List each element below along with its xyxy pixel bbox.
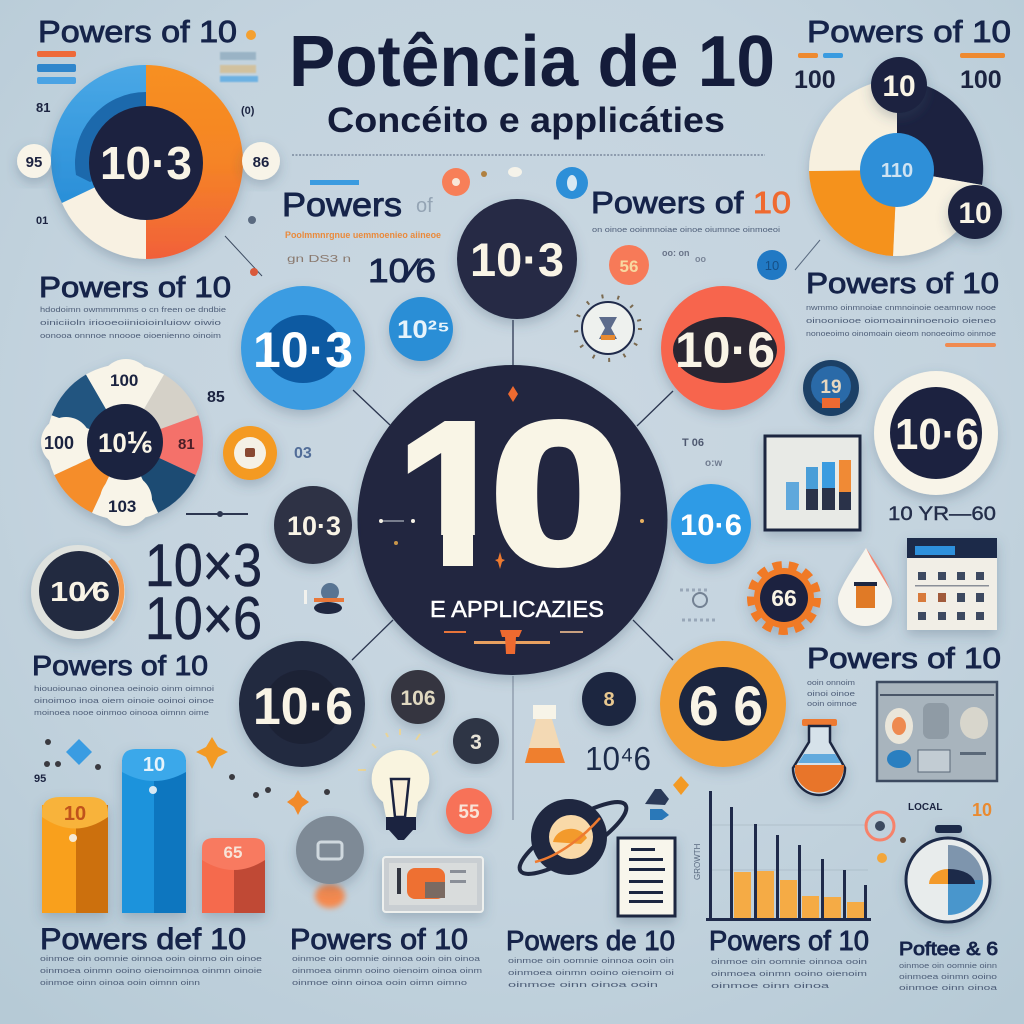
circle: dark top centre <box>457 199 577 319</box>
footer column 3: oinmoea oinmn ooino oienoim oi <box>508 968 674 977</box>
footer column 3: Powers de 10 <box>506 925 675 956</box>
legend blocks <box>37 30 258 84</box>
panel: icons card <box>877 682 997 781</box>
small coral ring and label: LOCAL <box>908 802 942 813</box>
footer column 1: oinmoe oinn oinoa ooin oimnn oinn <box>40 978 200 987</box>
big numbers: 10×3 <box>145 532 262 599</box>
footer column 1: oinmoe oin oomnie oinnoa ooin oinmo oin oinoe <box>40 954 262 963</box>
circle: dark 10-3 small: 10·3 <box>287 511 341 541</box>
bar coral <box>202 838 265 913</box>
heading: Powers of 10 <box>807 14 1011 49</box>
footer column 4: oinmoe oin oomnie oinnoa ooin <box>711 957 867 966</box>
circle: small 3 <box>453 718 499 764</box>
icon: small dark mask: 8 <box>603 689 615 711</box>
heading: powers right lower: ooin onnoim <box>807 678 855 687</box>
big number <box>408 419 621 568</box>
text block: powers centre left <box>282 180 441 289</box>
footer column 4: oinmoea oinmn ooino oienoim <box>711 969 867 978</box>
bar orange <box>42 797 108 913</box>
circle: blue 10-3: 10·3 <box>253 322 353 378</box>
icon: cloud <box>645 776 689 820</box>
connector lines <box>352 320 673 820</box>
circle: cream 10-6: 10·6 <box>895 410 979 459</box>
small labels <box>36 100 262 276</box>
side badge left: 95 <box>26 154 42 171</box>
small icons centre right: oo: on <box>662 248 690 258</box>
small chatter centre: 03 <box>294 445 312 462</box>
text block: powers right <box>806 268 999 347</box>
hub decoration <box>379 386 644 654</box>
flower labels: 100 <box>110 371 138 390</box>
footer column 3 <box>506 925 675 989</box>
flower wedges <box>41 359 203 526</box>
bar chart lower: GROWTH <box>693 843 702 880</box>
footer column 3: oinmoe oinn oinoa ooin <box>508 980 658 989</box>
icon: calendar <box>907 538 997 630</box>
side badge right: 86 <box>253 154 269 171</box>
circle: ringed 10-6: 10⁄6 <box>50 576 110 607</box>
central hub <box>358 365 668 675</box>
text block: powers lower left: oinoimoo inoa oiem oinoie ooinoi oinoe <box>34 696 214 705</box>
footer column 2: oinmoe oin oomnie oinnoa ooin oin oinoa <box>292 954 481 963</box>
small coral ring and label: 10 <box>972 800 992 820</box>
circle: orange 66 <box>660 641 786 767</box>
footer column 1 <box>40 923 262 987</box>
text block: powers right: nonoeoimo oinomoain oieom nonoeoimo oinmoe <box>806 329 996 338</box>
badge top <box>871 57 927 113</box>
footer column 2: oinmoe oinn oinoa ooin oimn oimno <box>292 978 467 987</box>
circle: small 106 <box>391 670 445 724</box>
text block: powers lower left <box>32 650 214 717</box>
footer column 2: oinmoea oinmn ooino oienoim oinoa oinm <box>292 966 482 975</box>
small labels: (0) <box>241 105 255 117</box>
circle: small blue: 10²⁵ <box>397 316 450 344</box>
small icons centre right: 56 <box>620 257 638 276</box>
gauge icon <box>906 825 990 922</box>
icon: document <box>618 838 675 916</box>
flower labels: 81 <box>178 436 195 453</box>
text block: powers left <box>39 272 231 340</box>
label 10-6: 10⁴6 <box>585 740 651 777</box>
heading: Powers of 10 <box>38 14 237 49</box>
text block: powers centre left: gn DS3 n <box>287 254 351 265</box>
icon: gear 66 <box>751 565 817 631</box>
small icons centre right: oo <box>695 254 706 264</box>
small coral ring and label <box>866 800 992 863</box>
donut chart <box>51 65 243 259</box>
pie chart: 110 <box>881 160 913 182</box>
footer column 2: Powers of 10 <box>290 924 468 956</box>
hub label: E APPLICAZIES <box>430 596 604 622</box>
icon: small bottle <box>525 705 565 763</box>
side badge left <box>17 144 51 178</box>
footer column 1: oinmoea oinmn ooino oienoimnoa oinmn oinoie <box>40 966 262 975</box>
footer column 5: Poftee & 6 <box>899 939 998 959</box>
circle: coral 55 <box>446 788 492 834</box>
footer column 5: oinmoea oinmn ooino <box>899 972 997 981</box>
big number: 1 <box>397 380 509 606</box>
text block: powers left: oonooa onnnoe nnoooe oioenienno oinoim <box>40 331 221 340</box>
circle: coral 10-6: 10·6 <box>675 322 775 378</box>
donut value: 10·3 <box>100 137 192 189</box>
text block: powers left: hdodoimn owmmmmms o cn freen oe dndbie <box>40 305 226 314</box>
circle: dark 10-6 lower left <box>239 641 365 767</box>
icon: small bits beside hub <box>304 583 344 614</box>
text block: powers right: oinooniooe oiomoainninoenoio oieneo <box>806 316 996 325</box>
big number: 0 <box>490 380 627 606</box>
text block: powers lower left: Powers of 10 <box>32 650 208 681</box>
heading: powers right lower <box>807 643 1001 708</box>
icon: faint sketch <box>680 590 718 620</box>
badge bottom: 10 <box>958 197 992 230</box>
flower labels: 103 <box>108 497 136 516</box>
icon: dark circle small: 19 <box>820 377 842 398</box>
flower centre <box>87 404 163 480</box>
bar blue <box>122 749 186 913</box>
labels 100: 100 <box>960 66 1002 94</box>
stars and marks: 95 <box>34 773 46 785</box>
icon: grey ball <box>296 816 364 908</box>
icon: dark circle small <box>803 360 859 416</box>
text block: powers right: nwmmo oinmnoiae cnmnoinoie oeamnow nooe <box>806 303 996 312</box>
footer column 1: Powers def 10 <box>40 923 246 956</box>
text block: powers centre left: Powers <box>282 186 402 223</box>
circle: dark 10-3 small <box>274 486 352 564</box>
text block: powers centre left: of <box>416 195 433 217</box>
bar chart card <box>765 436 860 530</box>
heading: powers right lower: oinoi oinoe <box>807 689 855 698</box>
3D bar chart <box>42 749 265 913</box>
badge bottom <box>948 185 1002 239</box>
small top icons <box>442 167 588 199</box>
badge top: 10 <box>882 70 916 103</box>
circle: coral 10-6 <box>661 286 785 410</box>
pie chart <box>809 80 983 256</box>
heading: powers of 10 centre right: on oinoe ooinmnoiae oinoe oiumnoe oinmoeoi <box>592 225 780 234</box>
circle: small blue <box>389 297 453 361</box>
label 10 yr 60: 10 YR—60 <box>888 504 996 525</box>
stars and marks <box>34 737 330 815</box>
circle: blue 10-6: 10·6 <box>680 509 742 542</box>
icon: device <box>383 857 483 912</box>
text block: powers right: Powers of 10 <box>806 268 999 300</box>
big numbers: 10×6 <box>145 585 262 652</box>
labels 100: 100 <box>794 66 836 94</box>
footer column 5: oinmoe oinn oinoa <box>899 983 998 992</box>
footer column 5: oinmoe oin oomnie oinn <box>899 961 997 970</box>
icon: lightbulb <box>358 729 438 840</box>
circle: orange 66: 6 6 <box>689 674 763 737</box>
text block: powers centre left: 10⁄6 <box>368 252 436 289</box>
circle: blue 10-6 <box>671 484 751 564</box>
title <box>289 22 775 140</box>
bar orange: 10 <box>64 803 86 825</box>
icon: drop <box>838 548 892 626</box>
text block: powers centre left: Poolmmnrgnue uemmoenieo aiineoe <box>285 230 441 240</box>
side badge right <box>242 142 280 180</box>
heading: powers of 10 centre right: Powers of 10 <box>591 185 791 220</box>
small chatter centre: o:w <box>705 458 722 469</box>
icon: orange badge <box>223 426 277 480</box>
heading: powers right lower: Powers of 10 <box>807 643 1001 675</box>
small chatter centre: T 06 <box>682 437 704 449</box>
panel: top-right pie <box>794 14 1011 256</box>
bar blue: 10 <box>143 754 165 776</box>
planet icon <box>511 791 635 885</box>
text block: powers lower left: moinoea nooe oinmoo oinooa oimnn oime <box>34 708 209 717</box>
circle: blue 10-3 <box>241 286 365 410</box>
big numbers <box>145 532 262 652</box>
circle: cream 10-6 <box>874 371 998 495</box>
text block: powers left: Powers of 10 <box>39 272 231 304</box>
footer column 5 <box>899 939 998 992</box>
circle: ringed 10-6 <box>31 545 125 639</box>
bar chart lower <box>693 791 871 921</box>
flower labels: 10⅙ <box>98 428 152 458</box>
footer column 4: Powers of 10 <box>709 925 869 956</box>
circle: coral 55: 55 <box>458 802 480 823</box>
text block: powers lower left: hiouoiounao oinonea oeinoio oinm oimnoi <box>34 684 214 693</box>
icon: small dark mask <box>582 672 636 726</box>
title: Potência de 10 <box>289 22 775 102</box>
panel: top-left donut <box>17 14 280 276</box>
icon: hourglass <box>576 296 640 360</box>
panel: flower chart <box>41 359 203 526</box>
small icons centre right <box>609 240 820 285</box>
text block: powers left: oiniciioln iriooeoiinioioinluiow oiwio <box>40 318 221 327</box>
circle: small 106: 106 <box>400 687 436 710</box>
title: Concéito e applicáties <box>327 101 725 140</box>
small labels: 01 <box>36 215 48 227</box>
small chatter centre: 85 <box>207 389 225 406</box>
small labels: 81 <box>36 100 50 115</box>
circle: small 3: 3 <box>470 731 482 754</box>
flower labels <box>44 371 195 516</box>
footer column 4: oinmoe oinn oinoa <box>711 981 831 990</box>
flower labels: 100 <box>44 433 74 453</box>
icon: gear 66: 66 <box>771 585 797 611</box>
small chatter centre <box>186 389 722 517</box>
footer column 2 <box>290 924 482 987</box>
labels 100 <box>794 53 1005 94</box>
circle: dark top centre: 10·3 <box>470 233 564 286</box>
footer column 3: oinmoe oin oomnie oinnoa ooin oin <box>508 956 674 965</box>
footer column 4 <box>709 925 869 990</box>
icon: flask <box>793 719 845 795</box>
circle: dark 10-6 lower left: 10·6 <box>253 678 353 736</box>
small icons centre right: 10 <box>765 258 779 273</box>
heading: powers right lower: ooin oimnoe <box>807 699 857 708</box>
bar coral: 65 <box>224 843 242 862</box>
